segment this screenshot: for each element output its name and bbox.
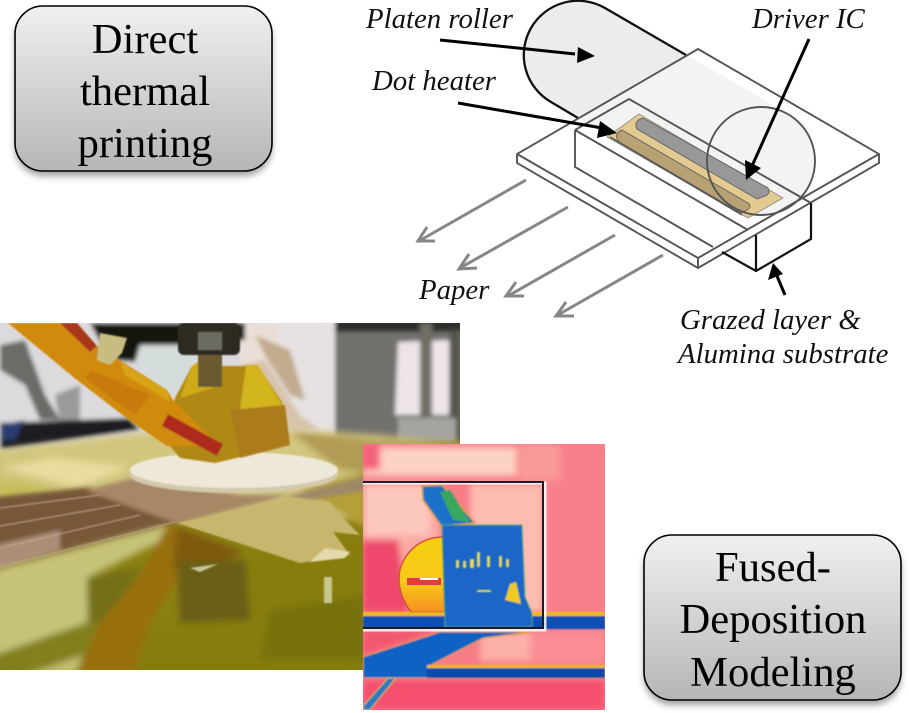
panel: thermal print head diagram (365, 1, 889, 370)
label: paper: Paper (418, 274, 490, 306)
panel: fused-deposition modeling label: Deposition (680, 596, 866, 643)
panel: direct thermal printing label: printing (78, 120, 212, 167)
label: grazed layer and alumina substrate (676, 304, 889, 370)
panel: direct thermal printing label: Direct (92, 16, 198, 63)
background (0, 315, 465, 455)
panel: fused-deposition modeling label: Modeling (690, 649, 856, 696)
paper plate (517, 49, 879, 268)
print bed (0, 430, 465, 525)
photo: fused-deposition printer nozzle (0, 315, 465, 675)
label: grazed layer and alumina substrate: Alumina substrate (676, 338, 889, 370)
reading text blobs (456, 552, 509, 592)
label: dot heater: Dot heater (371, 65, 497, 97)
label: driver IC: Driver IC (751, 3, 866, 35)
label: grazed layer and alumina substrate: Grazed layer & (680, 304, 861, 336)
arrow: grazed layer (768, 263, 785, 295)
arrows: paper direction (418, 180, 663, 316)
label: platen roller: Platen roller (365, 3, 514, 35)
thermal camera image (363, 444, 605, 710)
surface details (0, 495, 360, 603)
overlay frame (363, 483, 545, 630)
head block (575, 99, 811, 271)
cold body (363, 485, 605, 710)
platen roller (522, 0, 814, 214)
roller end circle (707, 107, 815, 215)
dot heater substrate (607, 114, 783, 218)
arrow: driver IC (745, 39, 809, 180)
arrow: dot heater (458, 103, 617, 138)
kapton wrapped tube and nozzle (8, 323, 290, 463)
panel: direct thermal printing label: thermal (80, 68, 210, 115)
arrow: platen roller (440, 40, 595, 63)
panel: fused-deposition modeling label: Fused- (715, 544, 831, 591)
white disc (130, 452, 338, 493)
panel: direct thermal printing label (15, 6, 272, 176)
hot half-disc (399, 537, 446, 612)
panel: fused-deposition modeling label (644, 535, 901, 705)
